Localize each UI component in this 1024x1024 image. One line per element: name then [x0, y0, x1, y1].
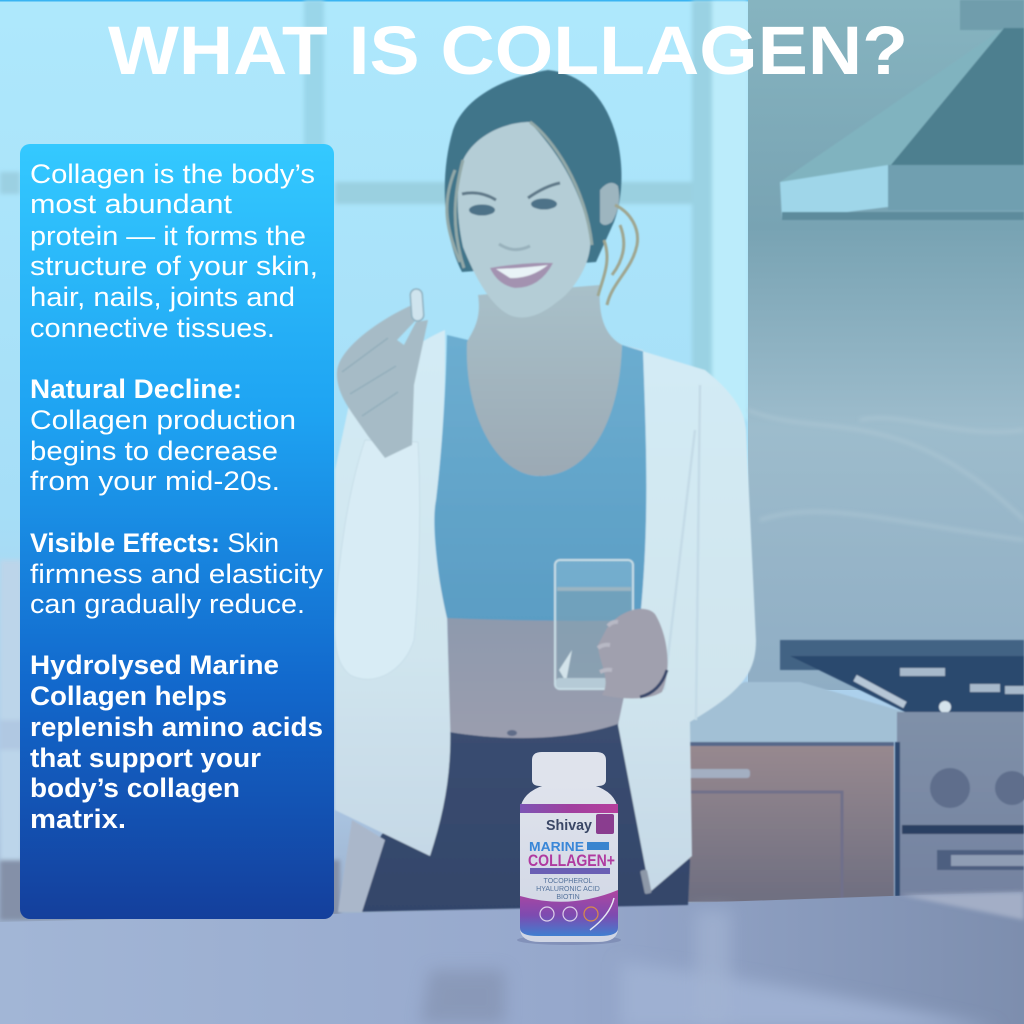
intro text: connective tissues.	[30, 313, 275, 343]
visible effects text: firmness and elasticity	[30, 559, 324, 589]
range hood	[780, 0, 1024, 220]
product name: MARINE	[529, 839, 584, 854]
hydrolysed marine collagen text: body’s collagen	[30, 773, 240, 803]
natural decline text: from your mid-20s.	[30, 466, 280, 496]
hydrolysed marine collagen text: Collagen helps	[30, 681, 227, 711]
capsule	[410, 289, 424, 321]
jacket left panel	[335, 330, 450, 856]
natural decline text: Collagen production	[30, 405, 296, 435]
product bottle: TOCOPHEROL	[544, 878, 593, 885]
product bottle	[517, 752, 621, 945]
hand on glass	[598, 609, 668, 698]
woman holding capsule and glass	[335, 70, 756, 912]
jacket right panel	[618, 345, 756, 892]
panel: what collagen is	[20, 144, 334, 919]
title: WHAT IS COLLAGEN?	[108, 12, 908, 89]
label wave	[520, 890, 618, 936]
nose	[499, 244, 530, 250]
intro text: hair, nails, joints and	[30, 282, 295, 312]
raised hand	[337, 305, 428, 458]
jacket back tail	[338, 820, 385, 912]
natural decline text	[30, 374, 296, 496]
face	[458, 122, 591, 317]
natural decline text: Natural Decline:	[30, 374, 242, 404]
sports top	[434, 335, 646, 621]
visible effects text: Visible Effects: Skin	[30, 528, 279, 558]
hydrolysed marine collagen text: matrix.	[30, 804, 126, 834]
zipper pull	[640, 869, 652, 894]
smile	[490, 263, 553, 288]
midriff	[447, 612, 650, 738]
bottle cap	[532, 752, 606, 786]
left sleeve fold	[335, 440, 420, 679]
label badges	[540, 907, 598, 921]
kitchen counter and cabinet	[672, 682, 905, 902]
hydrolysed marine collagen text: that support your	[30, 743, 261, 773]
natural decline text: begins to decrease	[30, 436, 278, 466]
wall	[748, 0, 1024, 690]
glass of water	[555, 560, 633, 689]
intro text: most abundant	[30, 189, 233, 219]
window frames	[0, 0, 748, 920]
eyes	[469, 204, 495, 216]
product bottle: COLLAGEN+	[528, 851, 615, 870]
ear	[600, 183, 619, 225]
fringe strands	[447, 122, 592, 268]
stove	[780, 640, 1024, 898]
hydrolysed marine collagen text: replenish amino acids	[30, 712, 323, 742]
hair back	[445, 70, 621, 272]
visible effects text: can gradually reduce.	[30, 589, 305, 619]
intro text: protein — it forms the	[30, 221, 306, 251]
brand: Shivay	[546, 817, 593, 834]
chest and neck	[467, 285, 622, 476]
intro text	[30, 159, 318, 343]
leggings	[350, 722, 690, 912]
table top	[0, 892, 1024, 1024]
intro text: Collagen is the body’s	[30, 159, 315, 189]
product bottle: HYALURONIC ACID	[536, 886, 600, 893]
hydrolysed marine collagen text: Hydrolysed Marine	[30, 650, 279, 680]
hydrolysed marine collagen text	[30, 650, 323, 834]
intro text: structure of your skin,	[30, 251, 318, 281]
visible effects text	[30, 528, 324, 619]
product bottle: BIOTIN	[556, 894, 580, 901]
bottle body	[520, 785, 618, 942]
